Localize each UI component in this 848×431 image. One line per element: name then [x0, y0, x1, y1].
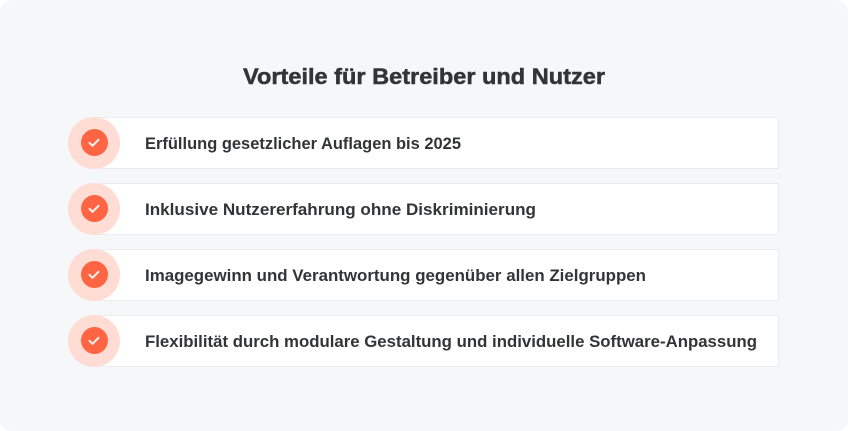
- row 3: image gain: [68, 249, 778, 301]
- icon: check badge: [68, 315, 120, 367]
- row card: [94, 316, 778, 366]
- row 1: legal requirements: [68, 117, 778, 169]
- row text: Inklusive Nutzererfahrung ohne Diskriminierung: [145, 200, 536, 219]
- row text: Erfüllung gesetzlicher Auflagen bis 2025: [145, 134, 461, 153]
- row card: [94, 184, 778, 234]
- icon: check badge: [68, 249, 120, 301]
- row text: Imagegewinn und Verantwortung gegenüber allen Zielgruppen: [145, 266, 646, 285]
- row text: Flexibilität durch modulare Gestaltung und individuelle Software-Anpassung: [145, 332, 757, 351]
- row 4: flexibility: [68, 315, 778, 367]
- title: Vorteile für Betreiber und Nutzer: [243, 64, 605, 89]
- list of benefits: [68, 117, 778, 367]
- icon: check badge: [68, 117, 120, 169]
- row card: [94, 118, 778, 168]
- row card: [94, 250, 778, 300]
- row 2: inclusive experience: [68, 183, 778, 235]
- icon: check badge: [68, 183, 120, 235]
